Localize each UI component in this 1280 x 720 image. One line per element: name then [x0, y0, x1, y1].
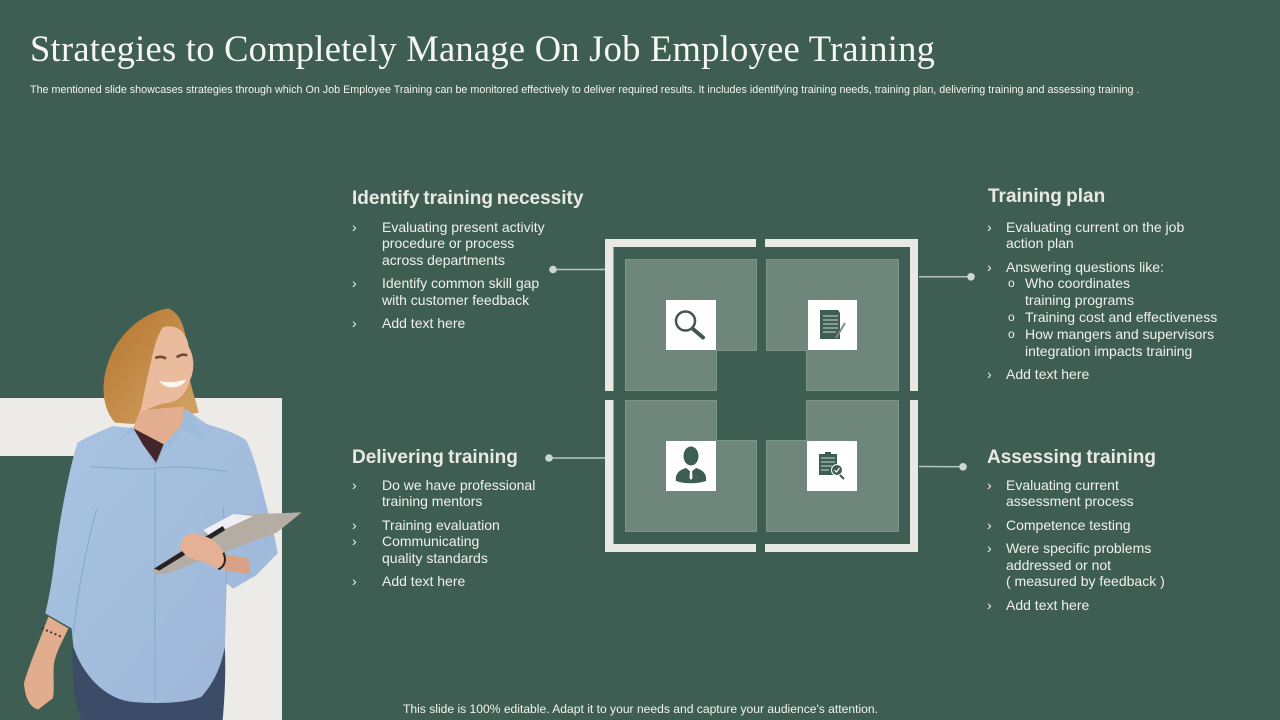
heading: Delivering training — [352, 447, 518, 468]
bullet list: o — [1008, 276, 1015, 290]
tablet — [153, 512, 302, 574]
footer note: This slide is 100% editable. Adapt it to your needs and capture your audience's attention. — [403, 702, 878, 716]
bullet list: Evaluating present activity — [382, 219, 545, 235]
shirt — [45, 408, 278, 703]
frame top-left — [605, 239, 756, 391]
bullet list: Competence testing — [1006, 517, 1131, 533]
face — [140, 326, 193, 413]
bracelet — [42, 628, 63, 637]
bullet list: Add text here — [382, 573, 465, 589]
bullet list: › — [352, 315, 357, 331]
connector: delivering — [545, 454, 605, 462]
bullet list: How mangers and supervisors — [1025, 326, 1214, 342]
bullet list: Training evaluation — [382, 517, 500, 533]
bullet list: with customer feedback — [382, 292, 529, 308]
hair — [104, 308, 199, 424]
panel: delivering training — [352, 447, 535, 589]
bullet list: assessment process — [1006, 493, 1134, 509]
bullet list: Communicating — [382, 533, 479, 549]
bullet list: Add text here — [1006, 366, 1089, 382]
collar — [113, 408, 207, 466]
eyes — [155, 355, 187, 359]
quadrant top-left — [626, 260, 756, 390]
bullet list: integration impacts training — [1025, 343, 1192, 359]
bullet list: › — [987, 477, 992, 493]
bullet list: Add text here — [1006, 597, 1089, 613]
bullet list — [987, 477, 1165, 613]
bullet list: › — [352, 517, 357, 533]
heading: Training plan — [988, 186, 1105, 207]
panel: training plan — [987, 186, 1217, 382]
bullet list: › — [987, 597, 992, 613]
bullet list: Evaluating current on the job — [1006, 219, 1184, 235]
bullet list: › — [987, 259, 992, 275]
bullet list: › — [352, 477, 357, 493]
bullet list: quality standards — [382, 550, 488, 566]
panel: assessing training — [987, 447, 1165, 613]
icon: magnifying glass — [666, 300, 716, 350]
hand — [180, 533, 226, 570]
bullet list — [352, 477, 535, 589]
bullet list — [352, 219, 545, 331]
diagram: central frame with quadrants — [545, 239, 975, 552]
bullet list: Identify common skill gap — [382, 275, 539, 291]
smile — [159, 379, 186, 387]
bullet list: Answering questions like: — [1006, 259, 1164, 275]
bullet list: › — [987, 366, 992, 382]
shirt folds and placket — [73, 467, 227, 700]
bullet list: Who coordinates — [1025, 275, 1130, 291]
neck — [133, 407, 184, 465]
bullet list: › — [352, 219, 357, 235]
jeans — [72, 645, 225, 720]
bullet list: o — [1008, 327, 1015, 341]
bullet list: training programs — [1025, 292, 1134, 308]
icon: document with pen — [808, 300, 857, 350]
forearm holding tablet — [222, 553, 250, 574]
frame bottom-right — [765, 400, 918, 552]
bullet list: action plan — [1006, 235, 1074, 251]
backdrop panel — [0, 398, 282, 720]
subtitle description: The mentioned slide showcases strategies through which On Job Employee Training can be monitored effectively to deliver required results. It includes identifying training needs, training plan, delivering training and assessing training . — [30, 84, 1139, 96]
frame bottom-left — [605, 400, 756, 552]
connector: identify — [549, 266, 605, 273]
bullet list: ( measured by feedback ) — [1006, 573, 1165, 589]
heading: Assessing training — [987, 447, 1156, 468]
bullet list: › — [987, 517, 992, 533]
bullet list: Were specific problems — [1006, 540, 1151, 556]
icon: clipboard with magnifier — [807, 441, 857, 491]
bullet list: › — [987, 219, 992, 235]
bullet list: across departments — [382, 252, 505, 268]
icon: businessman — [666, 441, 716, 491]
bullet list: › — [352, 573, 357, 589]
bullet list: training mentors — [382, 493, 482, 509]
bullet list: Do we have professional — [382, 477, 535, 493]
title: Strategies to Completely Manage On Job Employee Training — [30, 28, 935, 69]
quadrant bottom-right — [766, 400, 898, 532]
frame top-right — [765, 239, 918, 391]
bullet list: › — [352, 533, 357, 549]
panel: person photo illustration — [0, 308, 302, 720]
bullet list: addressed or not — [1006, 557, 1111, 573]
panel: identify training necessity — [352, 188, 584, 331]
bullet list: Add text here — [382, 315, 465, 331]
undershirt — [133, 428, 165, 466]
bullet list: o — [1008, 310, 1015, 324]
quadrant top-right — [766, 260, 898, 390]
connector: assessing — [919, 463, 967, 471]
connector: training plan — [919, 273, 975, 281]
heading: Identify training necessity — [352, 188, 583, 209]
bullet list: › — [352, 275, 357, 291]
quadrant bottom-left — [626, 400, 756, 532]
bullet list: › — [987, 540, 992, 556]
bullet list: Training cost and effectiveness — [1025, 309, 1217, 325]
bullet list: procedure or process — [382, 235, 514, 251]
left forearm — [24, 617, 68, 709]
bullet list — [987, 219, 1217, 382]
bullet list: Evaluating current — [1006, 477, 1119, 493]
